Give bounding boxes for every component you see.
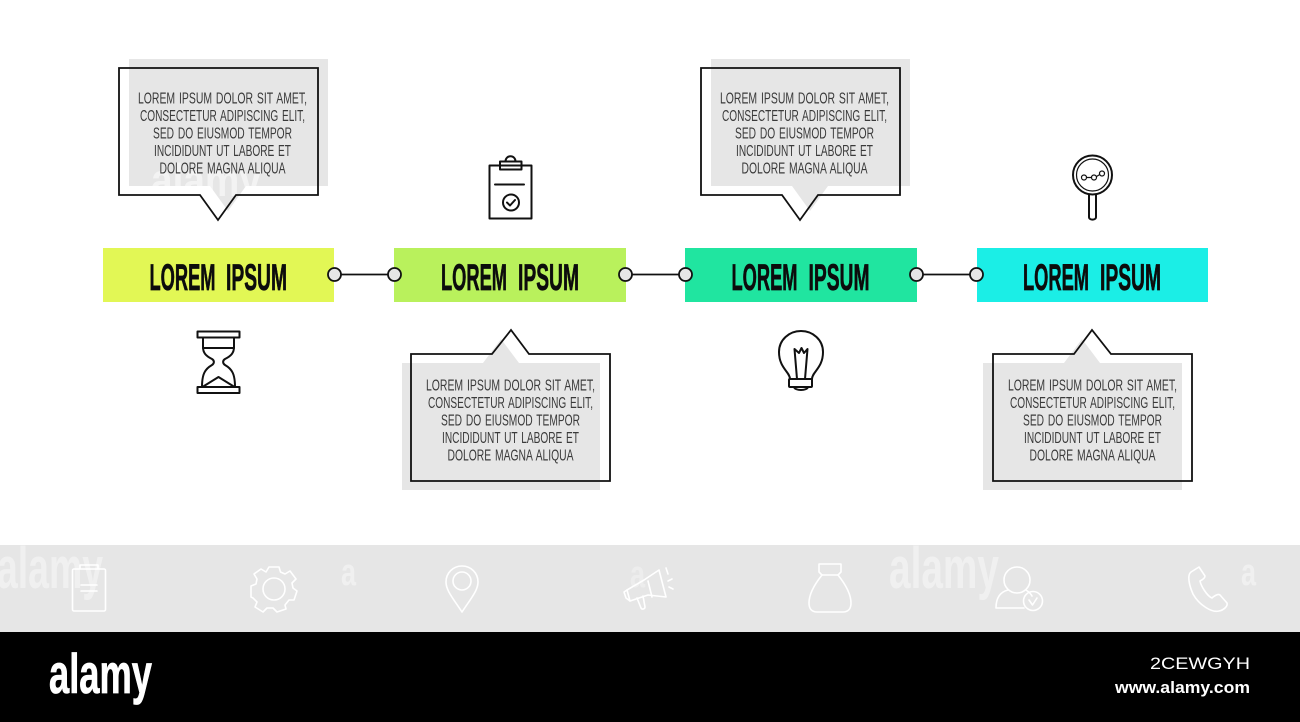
footer band with faint icons — [0, 536, 1300, 632]
callout: step 4: INCIDIDUNT UT LABORE ET — [1024, 430, 1161, 447]
callout: step 2: INCIDIDUNT UT LABORE ET — [442, 430, 579, 447]
step bar 1: LOREM — [150, 257, 216, 298]
icon: hourglass — [198, 332, 240, 393]
icon: telephone — [1189, 567, 1227, 611]
callout: step 3: SED DO EIUSMOD TEMPOR — [735, 126, 874, 142]
icon: clipboard — [490, 156, 532, 218]
callout: step 2: CONSECTETUR ADIPISCING ELIT, — [428, 395, 593, 412]
callout: step 3: CONSECTETUR ADIPISCING ELIT, — [722, 108, 887, 125]
callout: step 3: DOLORE MAGNA ALIQUA — [742, 160, 868, 178]
callout: step 2: SED DO EIUSMOD TEMPOR — [441, 412, 580, 430]
icon: document — [72, 565, 106, 611]
callout: step 3: INCIDIDUNT UT LABORE ET — [736, 143, 873, 160]
website: www.alamy.com — [1114, 678, 1250, 697]
callout: step 2 — [402, 330, 610, 490]
callout: step 1: alamy — [151, 154, 261, 206]
callout: step 4 — [983, 330, 1192, 490]
callout: step 1 — [119, 59, 328, 220]
footer band with faint icons: a — [341, 552, 357, 594]
callout: step 4: CONSECTETUR ADIPISCING ELIT, — [1010, 395, 1175, 412]
callout: step 1: CONSECTETUR ADIPISCING ELIT, — [140, 108, 305, 125]
callout: step 2: LOREM IPSUM DOLOR SIT AMET, — [426, 378, 595, 394]
callout: step 1: INCIDIDUNT UT LABORE ET — [154, 143, 291, 160]
step bar 3: IPSUM — [808, 257, 870, 298]
step bar 4 — [977, 248, 1208, 302]
connector 2 to 3 — [619, 268, 692, 281]
footer band with faint icons: alamy — [889, 536, 999, 601]
icon: light bulb — [779, 331, 823, 390]
footer band with faint icons: a — [1241, 552, 1257, 594]
connector 3 to 4 — [910, 268, 983, 281]
footer logo: alamy — [49, 642, 152, 705]
callout: step 1: LOREM IPSUM DOLOR SIT AMET, — [138, 90, 307, 108]
callout: step 1: SED DO EIUSMOD TEMPOR — [153, 126, 292, 142]
footer band with faint icons: alamy — [0, 536, 103, 601]
footer band with faint icons: a — [630, 554, 646, 596]
step bar 2: LOREM — [441, 257, 507, 298]
connector 1 to 2 — [328, 268, 401, 281]
callout: step 4: LOREM IPSUM DOLOR SIT AMET, — [1008, 378, 1177, 394]
callout: step 2: DOLORE MAGNA ALIQUA — [448, 448, 574, 464]
callout: step 3 — [701, 59, 910, 220]
icon: megaphone — [624, 568, 673, 609]
icon: map pin — [446, 566, 478, 612]
step bar 1: IPSUM — [226, 257, 287, 298]
step bar 3 — [685, 248, 917, 302]
step bar 2: IPSUM — [518, 257, 579, 298]
footer black strip — [0, 632, 1300, 722]
image id: 2CEWGYH — [1150, 654, 1250, 673]
step bar 3: LOREM — [732, 257, 798, 298]
callout: step 3: LOREM IPSUM DOLOR SIT AMET, — [720, 90, 889, 108]
callout: step 1: DOLORE MAGNA ALIQUA — [160, 160, 286, 178]
callout: step 4: SED DO EIUSMOD TEMPOR — [1023, 412, 1162, 430]
step bar 4: IPSUM — [1100, 257, 1161, 298]
step bar 4: LOREM — [1023, 257, 1089, 298]
step bar 1 — [103, 248, 334, 302]
icon: gear — [251, 567, 297, 612]
icon: magnifier with chart — [1073, 156, 1112, 220]
icon: sack — [809, 564, 851, 612]
callout: step 4: DOLORE MAGNA ALIQUA — [1030, 448, 1156, 464]
icon: user with check — [996, 567, 1042, 610]
step bar 2 — [394, 248, 626, 302]
